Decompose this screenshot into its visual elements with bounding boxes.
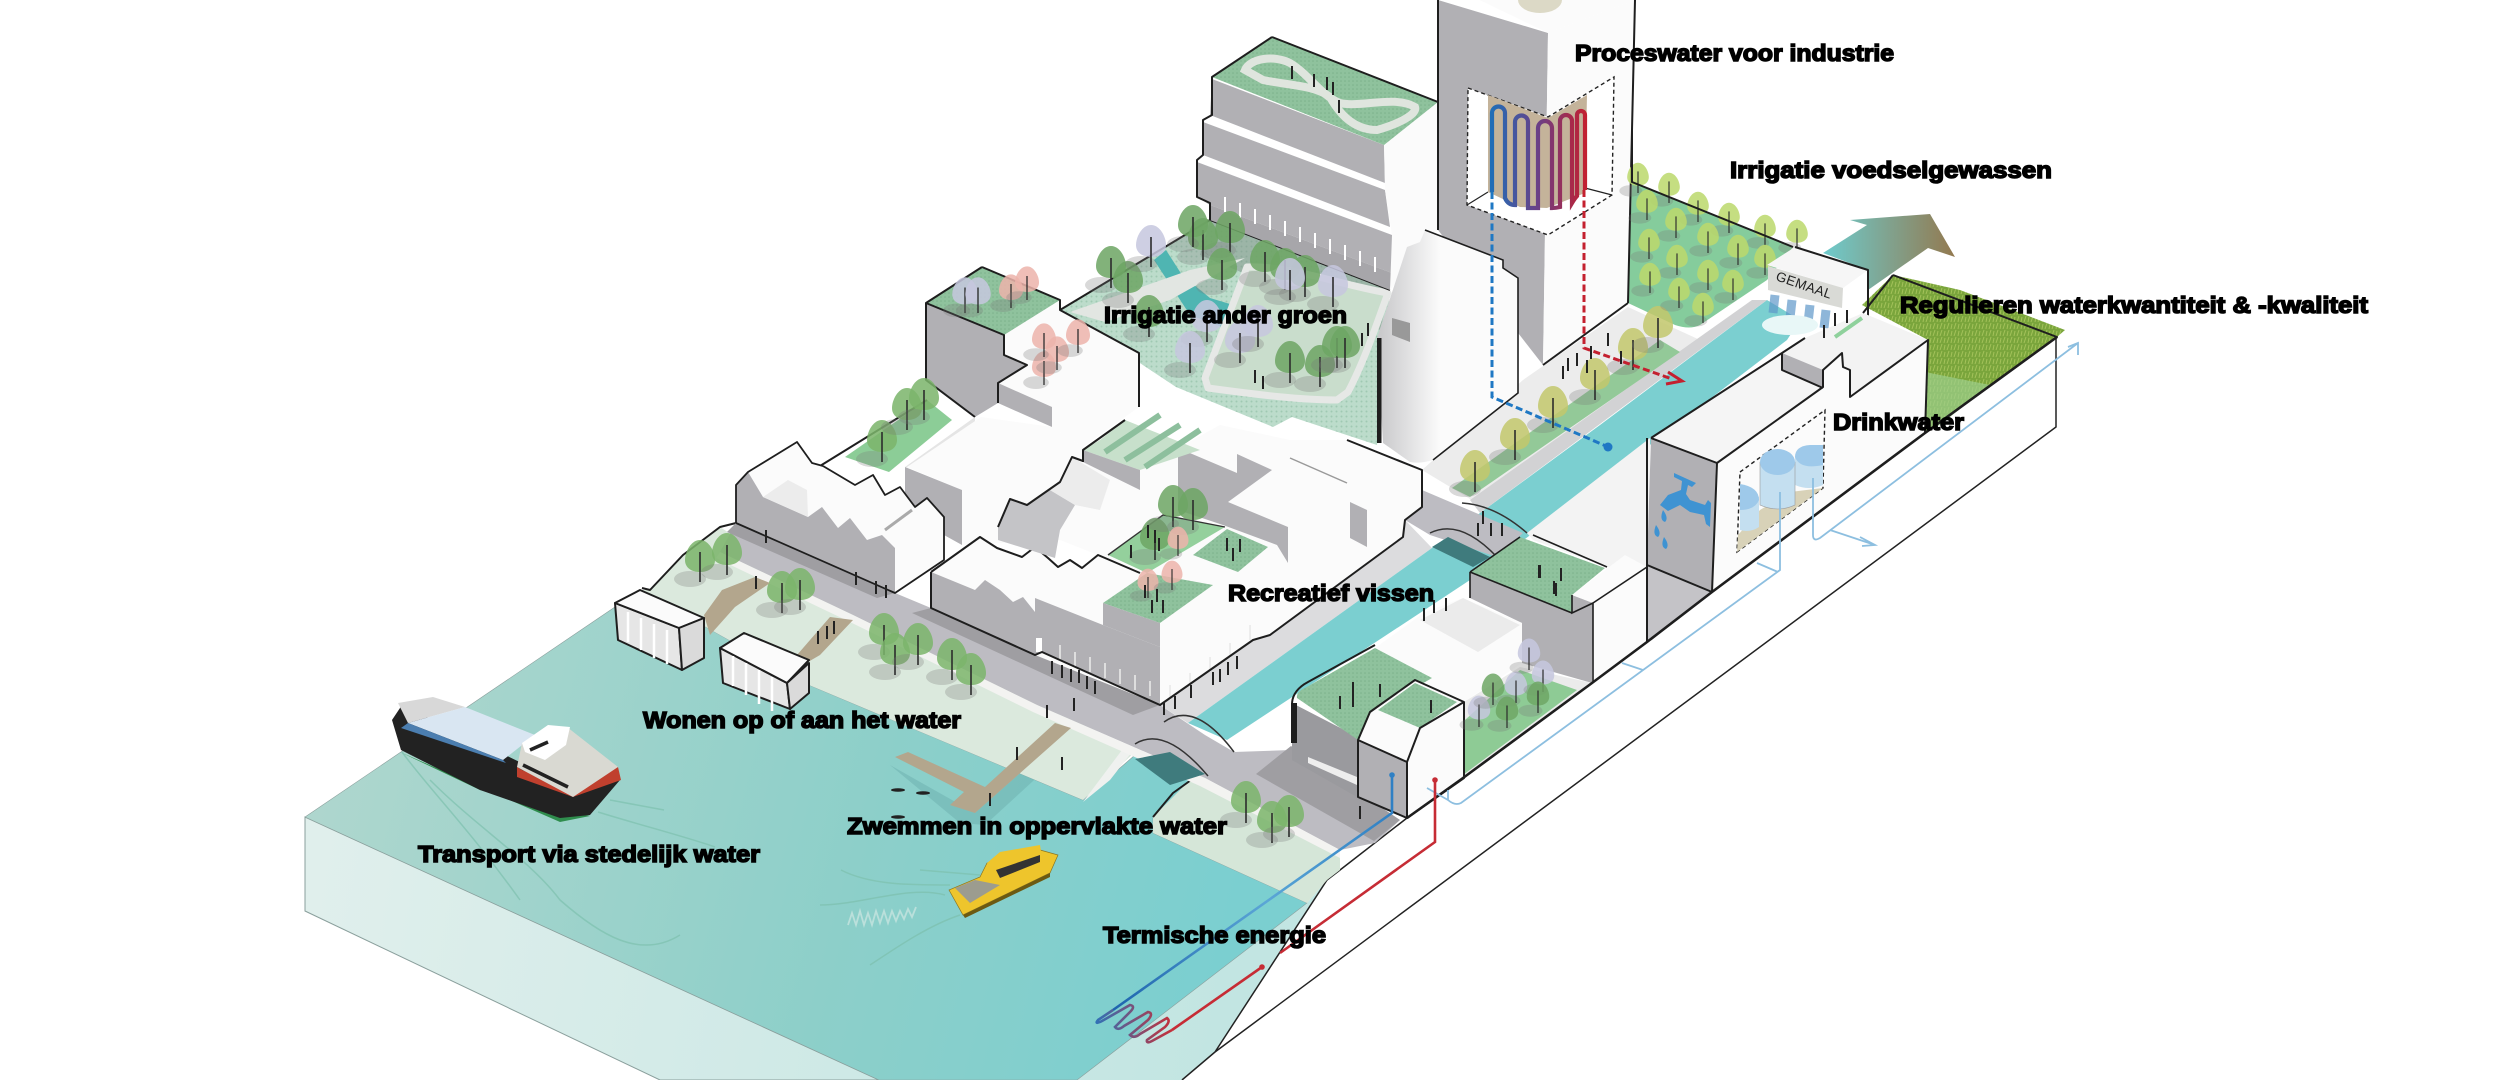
wakes on the water — [402, 752, 980, 965]
jetty shadow — [890, 728, 1080, 825]
canal flow arrow — [1823, 214, 1955, 290]
street along the water — [720, 523, 1400, 850]
houseboat two — [720, 633, 809, 711]
bank: right of the canal — [1153, 780, 1340, 903]
green roofs on central block — [1103, 515, 1268, 647]
base block outlines on right side — [1182, 337, 2056, 1080]
bank strip beside canal — [1470, 300, 1767, 513]
middle white block — [907, 417, 1140, 555]
houseboat one — [615, 590, 704, 670]
tap icon — [1654, 473, 1711, 549]
tree strip paving — [1422, 307, 1700, 505]
garden — [1463, 667, 1592, 778]
gabled row houses — [736, 442, 944, 593]
tower — [1438, 0, 1635, 365]
swimmers — [891, 788, 930, 819]
paving behind the tap building — [1527, 438, 1650, 570]
small gabled building — [998, 457, 1110, 558]
tall building with roof garden — [926, 267, 1139, 447]
water surface of the river — [305, 590, 1307, 1080]
yellow pilot boat — [949, 845, 1058, 918]
trees in the park — [1085, 205, 1360, 565]
cut section beside river — [1077, 880, 1327, 1080]
industry process water cutaway with coil — [1467, 77, 1614, 235]
label: Irrigatie ander groen: Irrigatie ander groen — [1104, 302, 1347, 328]
drinking water building — [1407, 275, 2057, 818]
white house by canal — [1375, 598, 1522, 702]
paving beside the canal — [1160, 520, 1432, 723]
green strip with trees — [1452, 340, 1680, 497]
dashed process water lines — [1492, 190, 1672, 446]
light blue distribution pipes — [1427, 343, 2078, 804]
GEMAAL sign: GEMAAL — [1774, 269, 1834, 302]
label: Proceswater voor industrie: Proceswater voor industrie — [1575, 40, 1894, 66]
dashed line ends — [1604, 372, 1682, 452]
thermal pipe ends — [1259, 772, 1438, 970]
lilac and pink trees — [943, 225, 1554, 732]
label: Zwemmen in oppervlakte water: Zwemmen in oppervlakte water — [847, 813, 1227, 839]
bridge lower — [1135, 715, 1234, 785]
canal — [1188, 300, 1800, 740]
orchard trees — [1619, 163, 1808, 327]
jetties and ramps — [704, 577, 1071, 813]
cargo ship — [392, 697, 621, 822]
label: Drinkwater: Drinkwater — [1833, 409, 1964, 435]
street pavement strip — [716, 552, 1340, 858]
people — [756, 66, 1847, 819]
bridge upper — [1405, 490, 1527, 567]
large central block — [931, 420, 1422, 705]
bank: green quay — [640, 527, 1135, 800]
abutment wedge — [1083, 748, 1135, 802]
olive trees along the canal — [1449, 306, 1673, 497]
thermal energy pipes with coil — [1097, 775, 1435, 1042]
trees on the quay — [674, 378, 1304, 848]
orchard field — [1628, 182, 1793, 328]
label: Recreatief vissen: Recreatief vissen — [1228, 580, 1434, 606]
tap building lower panel — [1647, 565, 1712, 642]
label: Irrigatie voedselgewassen: Irrigatie voedselgewassen — [1730, 157, 2052, 183]
corner building with rounded green roof — [1291, 645, 1464, 818]
canal-side green roof building — [1470, 535, 1647, 683]
park: irrigated greenery — [1060, 220, 1390, 445]
green strip roof — [1083, 415, 1200, 490]
office building with green roof — [1197, 37, 1438, 290]
drinking water tanks cutaway — [1737, 410, 1825, 552]
quay edge line — [642, 523, 736, 590]
label: Wonen op of aan het water: Wonen op of aan het water — [643, 707, 961, 733]
rounded white building — [1377, 230, 1518, 463]
front face of water block — [305, 817, 879, 1080]
label: Termische energie: Termische energie — [1103, 922, 1326, 948]
pumping station — [1762, 247, 1868, 335]
crop field — [1862, 275, 2065, 433]
shaded sidewalks — [727, 523, 1400, 841]
label: Transport via stedelijk water: Transport via stedelijk water — [418, 841, 760, 867]
middle block wall — [905, 467, 962, 545]
label: Regulieren waterkwantiteit: Regulieren waterkwantiteit & -kwaliteit — [1900, 292, 2368, 318]
orchard back edge — [1632, 130, 1793, 247]
green strip courtyard — [820, 400, 975, 472]
